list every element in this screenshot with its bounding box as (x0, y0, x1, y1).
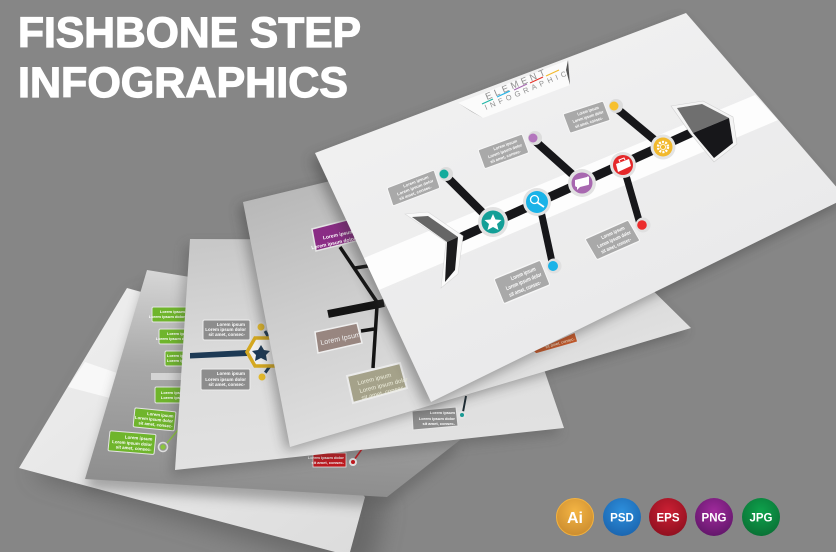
yellow dots and connectors (256, 322, 270, 382)
label: lower middle: Lorem ipsum (510, 266, 537, 283)
gray label lower right (412, 407, 458, 430)
green label 5: Lorem ipsum (147, 411, 174, 419)
end dot: red (636, 218, 650, 232)
teal connector and dot (458, 396, 466, 419)
label: lower middle: sit amet, consec- (508, 280, 543, 299)
label: upper middle (478, 134, 529, 169)
green label 6 (108, 431, 156, 454)
green label 2: Lorem ipsum (167, 331, 192, 336)
green label 6: Lorem ipsum dolor (112, 439, 152, 447)
gray label lower right: Lorem ipsum dolor (419, 416, 455, 421)
badge: PNG (695, 498, 733, 536)
label: upper middle: Lorem ipsum dolor (487, 142, 523, 159)
red connector and dot (349, 449, 362, 466)
label: upper middle: sit amet, consec- (489, 148, 522, 164)
label: upper left: sit amet, consec- (399, 184, 433, 201)
green label 6: Lorem ipsum (125, 435, 153, 442)
label: lower middle: Lorem ipsum dolor (505, 272, 543, 292)
label: upper right: Lorem ipsum (576, 104, 600, 117)
title: FISHBONE STEP (18, 9, 361, 57)
label: lower right: Lorem ipsum dolor (596, 230, 632, 249)
label: upper middle: Lorem ipsum (493, 138, 518, 152)
gray label lower: Lorem ipsum (217, 371, 245, 376)
label: lower right (585, 220, 640, 260)
label: upper left: Lorem ipsum (403, 174, 429, 189)
end dot: purple (528, 131, 542, 145)
badge: PNG: PNG (702, 512, 727, 524)
slide 5: front fishbone sheet (310, 13, 836, 408)
green label 5: Lorem ipsum dolor (135, 415, 174, 424)
light band (364, 95, 778, 290)
node: chat (568, 169, 596, 197)
badge: EPS (649, 498, 687, 536)
badge: EPS: EPS (656, 512, 680, 524)
gray label lower right: sit amet, consec- (423, 421, 456, 426)
banner (458, 60, 570, 118)
orange label (533, 332, 578, 354)
navy spine (190, 350, 247, 358)
green label 5: sit amet, consec- (138, 420, 173, 429)
red label (308, 453, 346, 467)
green label 5 (133, 408, 176, 431)
label: upper right: sit amet, consec- (574, 115, 604, 129)
badge: PSD (603, 498, 641, 536)
gray label upper: Lorem ipsum (217, 322, 245, 327)
green label 3: Lorem ipsum (167, 353, 192, 358)
node: search (523, 188, 551, 216)
green label 2: Lorem ipsum dolor (156, 336, 192, 341)
badge: JPG: JPG (749, 512, 773, 524)
node: briefcase (610, 152, 636, 178)
red label: sit amet, consec- (312, 460, 345, 465)
spine and bones (445, 107, 695, 262)
badge: Ai (556, 498, 594, 536)
slide 3: navy hexagon sheet (171, 239, 564, 476)
label: upper right (563, 101, 610, 133)
end dot: teal (439, 167, 453, 181)
green label 2 (156, 329, 195, 344)
green label 1: Lorem ipsum (160, 309, 185, 314)
banner: INFOGRAPHIC (483, 69, 568, 112)
label: lower middle (494, 260, 550, 304)
hexagon star node (247, 338, 283, 366)
end dot: yellow (609, 99, 623, 113)
taupe label (315, 323, 362, 353)
end dot: blue (546, 258, 562, 274)
node: gear (650, 134, 676, 160)
label: upper right: Lorem ipsum dolor (572, 109, 605, 124)
green label 3: Lorem ipsum (167, 358, 192, 363)
title (18, 9, 361, 107)
gray label lower: Lorem ipsum dolor (205, 377, 246, 382)
green label 3 (165, 351, 195, 366)
tan label: Lorem ipsum (357, 373, 392, 387)
slide 1: back sheet (19, 288, 386, 552)
green connector and ring (158, 430, 178, 452)
node: star (478, 207, 508, 237)
label: upper left (387, 170, 440, 206)
format badges (556, 498, 780, 536)
gray label lower: sit amet, consec- (208, 382, 246, 387)
purple label: Lorem ipsum (322, 229, 355, 241)
green label 1 (149, 307, 188, 322)
gray label lower right: Lorem ipsum (430, 410, 455, 415)
badge: JPG (742, 498, 780, 536)
head (671, 101, 737, 162)
tan label: Lorem ipsum dolor (359, 377, 409, 395)
banner: ELEMENT (484, 68, 547, 103)
purple label (311, 214, 376, 251)
gray label upper: sit amet, consec- (208, 332, 246, 337)
taupe label: Lorem Ipsum (320, 332, 362, 347)
orange label: sit amet, consec- (545, 336, 576, 349)
gray label upper: Lorem ipsum dolor (205, 327, 246, 332)
purple label: Lorem ipsum dolor (311, 236, 356, 251)
tan label (347, 363, 409, 403)
green label 4: Lorem ipsum (161, 390, 186, 395)
red label: Lorem ipsum dolor (308, 455, 344, 460)
tail (405, 212, 463, 288)
gray label lower (201, 369, 250, 390)
tan label: sit amet, consec- (361, 385, 406, 402)
green label 1: Lorem ipsum dolor (149, 314, 185, 319)
green label 4 (155, 387, 187, 403)
green label 4: Lorem ipsum (161, 395, 186, 400)
label: lower right: sit amet, consec- (600, 237, 633, 255)
title: INFOGRAPHICS (18, 59, 348, 107)
green label 6: sit amet, consec- (116, 444, 152, 452)
slide 4: purple label sheet (239, 140, 691, 451)
label: upper left: Lorem ipsum dolor (396, 178, 434, 197)
badge: PSD: PSD (610, 512, 634, 524)
badge: Ai: Ai (567, 510, 583, 527)
label: lower right: Lorem ipsum (600, 225, 626, 240)
gray label upper (203, 320, 250, 340)
fishbone lines (328, 247, 384, 368)
slide 2: green labels sheet (85, 270, 460, 507)
